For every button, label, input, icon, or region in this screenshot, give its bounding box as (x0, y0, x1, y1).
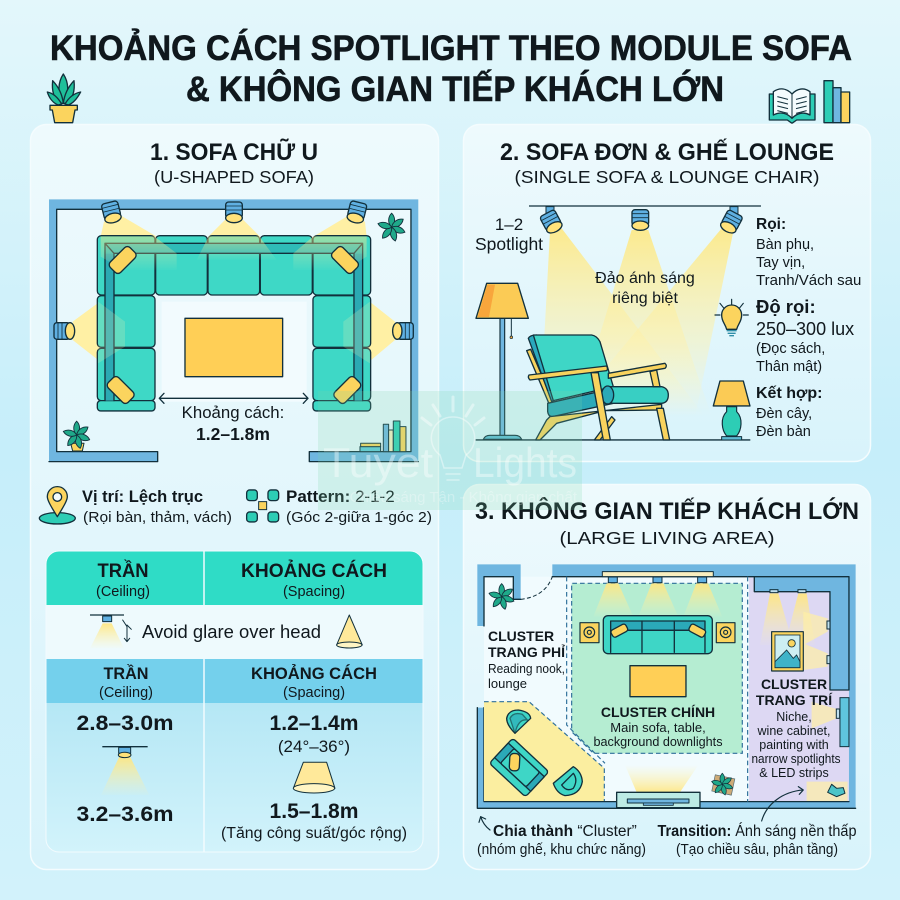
label: 1-2 spotlight: 1–2 (495, 215, 523, 234)
text: combine: Đèn bàn (756, 424, 811, 440)
ceiling values (76, 712, 174, 826)
icon: potted plant (47, 74, 81, 123)
light beams (73, 216, 395, 367)
table header (96, 560, 387, 600)
lounge seating (489, 710, 582, 797)
panel: large living area (464, 484, 870, 870)
text: aim (756, 216, 861, 289)
second header: KHOẢNG CÁCH (251, 664, 377, 683)
legend: pattern: (Góc 2-giữa 1-góc 2) (286, 509, 432, 526)
label: fashion cluster: CLUSTER (488, 628, 554, 644)
legend: position: Vị trí: Lệch trục (82, 488, 203, 506)
table header: (Ceiling) (96, 584, 150, 600)
watermark: Chiếu sáng Tận - Không gian chất (350, 489, 578, 506)
title (50, 28, 852, 109)
small decor (828, 784, 845, 797)
walls (477, 564, 856, 808)
lounge chair (527, 335, 670, 440)
text: illuminance: 250–300 lux (756, 319, 854, 339)
light beams (540, 228, 733, 417)
label: decor cluster (752, 676, 840, 780)
plant near door (488, 584, 515, 610)
text: combine: Kết hợp: (756, 385, 822, 402)
second header: TRẦN (104, 664, 148, 683)
heading: panel 3 (475, 497, 859, 548)
heading: panel 2: (SINGLE SOFA & LOUNGE CHAIR) (514, 167, 820, 187)
table header: TRẦN (98, 560, 148, 582)
text: combine (756, 385, 822, 440)
label: fashion cluster: TRANG PHỈ (488, 644, 565, 660)
label: decor cluster: painting with (759, 738, 829, 752)
watermark: Tuyet (323, 439, 433, 486)
cluster arrow (479, 817, 490, 830)
label: main cluster: background downlights (594, 734, 723, 749)
second header: (Ceiling) (99, 685, 153, 701)
text: aim: Tranh/Vách sau (756, 272, 861, 289)
spacing values: 1.5–1.8m (270, 800, 358, 823)
label: light island (595, 270, 695, 307)
second header: (Spacing) (283, 685, 345, 701)
text: illuminance: Độ rọi: (756, 296, 816, 317)
spacing values (221, 712, 407, 842)
label: decor cluster: CLUSTER (761, 676, 827, 692)
floor lamp (476, 283, 528, 439)
zone: main cluster (572, 583, 742, 753)
panel: single sofa and lounge chair (464, 124, 870, 462)
floor plan: U sofa room (49, 199, 418, 462)
label: decor cluster: TRANG TRÍ (756, 692, 833, 708)
ceiling values: 3.2–3.6m (76, 803, 174, 826)
title: KHOẢNG CÁCH SPOTLIGHT THEO MODULE SOFA (50, 28, 852, 68)
glare note (90, 615, 362, 648)
distance arrow (159, 393, 308, 403)
label: spacing (182, 403, 284, 444)
track and spotlights (529, 206, 761, 235)
label: 1-2 spotlight: Spotlight (475, 234, 543, 254)
glare note: Avoid glare over head (142, 622, 321, 642)
painting (772, 632, 803, 671)
watermark (318, 391, 582, 510)
plant bottom left (63, 421, 91, 451)
table lamp (713, 381, 750, 440)
note: transition: (Tạo chiều sâu, phân tầng) (676, 841, 838, 858)
zone: reading nook (484, 702, 604, 801)
legend: pattern (247, 487, 432, 526)
heading: panel 1: 1. SOFA CHỮ U (150, 138, 318, 166)
illustration: lounge chair scene (476, 206, 761, 440)
label: spacing: Khoảng cách: (182, 403, 284, 422)
text: aim: Rọi: (756, 216, 786, 233)
ceiling values: 2.8–3.0m (76, 712, 174, 735)
icon: books (769, 81, 850, 123)
text: illuminance (756, 296, 854, 375)
rug (185, 318, 283, 377)
side tables (580, 623, 735, 643)
second header (99, 664, 377, 701)
label: spacing: 1.2–1.8m (196, 424, 270, 444)
transition arrow (762, 787, 803, 821)
label: 1-2 spotlight (475, 215, 543, 254)
main sofa (603, 616, 712, 654)
note: cluster: (nhóm ghế, khu chức năng) (477, 841, 646, 858)
label: decor cluster: wine cabinet, (757, 724, 830, 738)
note: transition: Transition: Ánh sáng nền thấp (658, 823, 856, 840)
floor line (476, 438, 750, 442)
books (360, 421, 406, 452)
pillows (106, 245, 362, 405)
table header: (Spacing) (283, 584, 345, 600)
plant lower right (711, 773, 735, 796)
wall spotlights (770, 590, 840, 718)
label: light island: Đảo ánh sáng (595, 270, 695, 287)
label: fashion cluster: Reading nook, (488, 661, 565, 676)
bulb icon (715, 299, 748, 336)
label: main cluster: Main sofa, table, (610, 720, 706, 735)
spacing values: 1.2–1.4m (270, 712, 358, 735)
door arc (521, 577, 552, 599)
U sofa (97, 236, 371, 411)
text: aim: Bàn phụ, (756, 237, 814, 253)
heading: panel 1: (U-SHAPED SOFA) (154, 167, 314, 187)
label: fashion cluster (488, 628, 565, 691)
label: light island: riêng biệt (612, 290, 678, 307)
text: illuminance: Thân mật) (756, 359, 822, 375)
TV console (617, 765, 700, 808)
label: main cluster: CLUSTER CHÍNH (601, 704, 715, 720)
heading: panel 2 (500, 138, 834, 187)
title: & KHÔNG GIAN TIẾP KHÁCH LỚN (186, 69, 724, 109)
table: ceiling and spacing (46, 551, 423, 852)
note: cluster (477, 823, 646, 858)
heading: panel 3: (LARGE LIVING AREA) (560, 528, 774, 548)
table header: KHOẢNG CÁCH (241, 560, 387, 582)
legend: pattern: Pattern: 2-1-2 (286, 487, 395, 506)
heading: panel 1 (150, 138, 318, 187)
plant top right (377, 213, 406, 242)
watermark: Lights (473, 439, 577, 486)
legend: position: (Rọi bàn, thảm, vách) (83, 509, 232, 526)
dashed dividers (567, 577, 748, 802)
spacing values: (24°–36°) (278, 737, 350, 756)
note: transition (658, 823, 856, 858)
text: illuminance: (Đọc sách, (756, 341, 825, 357)
spacing values: (Tăng công suất/góc rộng) (221, 825, 407, 842)
downlight bar (593, 572, 722, 617)
floor plan: living area clusters (477, 564, 856, 830)
spotlights (54, 200, 413, 339)
rug (630, 666, 686, 697)
panel: U-shaped sofa (30, 124, 438, 870)
heading: panel 2: 2. SOFA ĐƠN & GHẾ LOUNGE (500, 138, 834, 166)
note: cluster: Chia thành “Cluster” (493, 823, 637, 840)
zone: decor (749, 577, 849, 802)
heading: panel 3: 3. KHÔNG GIAN TIẾP KHÁCH LỚN (475, 497, 859, 525)
legend: position (39, 487, 232, 526)
label: decor cluster: Niche, (776, 710, 812, 724)
label: main cluster (594, 704, 723, 749)
label: decor cluster: narrow spotlights (752, 752, 840, 766)
label: decor cluster: & LED strips (759, 766, 829, 780)
text: combine: Đèn cây, (756, 406, 812, 422)
text: aim: Tay vịn, (756, 255, 805, 271)
label: fashion cluster: lounge (488, 676, 527, 691)
